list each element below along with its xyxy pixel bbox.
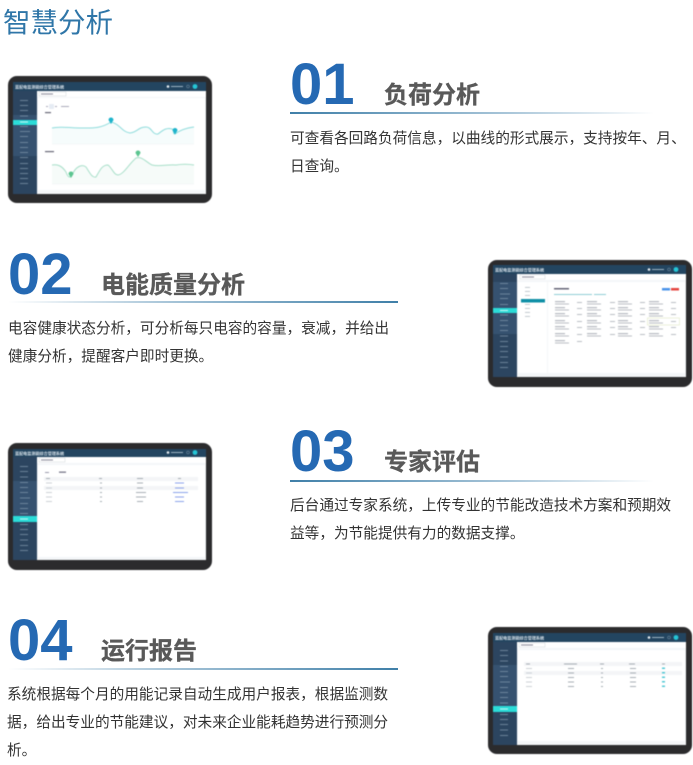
divider (290, 112, 654, 114)
heading: 负荷分析 (384, 82, 480, 109)
section 02 (8, 242, 693, 388)
description (7, 686, 388, 759)
description: 析。 (7, 743, 36, 759)
divider (8, 668, 398, 670)
number 02: 02 (8, 242, 73, 307)
description (290, 130, 686, 175)
description (8, 320, 389, 365)
screenshot: report table: 蓝配电监测能综合管理系统 (495, 634, 544, 640)
description: 电容健康状态分析，可分析每只电容的容量，衰减，并给出 (8, 321, 389, 337)
heading: 电能质量分析 (101, 272, 245, 299)
number 03: 03 (290, 419, 355, 484)
screenshot: expert table: 蓝配电监测能综合管理系统 (15, 450, 64, 456)
title: 智慧分析 (3, 7, 113, 38)
divider (290, 480, 654, 482)
number 01: 01 (290, 52, 355, 117)
description: 后台通过专家系统，上传专业的节能改造技术方案和预期效 (290, 498, 671, 514)
description: 系统根据每个月的用能记录自动生成用户报表，根据监测数 (7, 687, 388, 703)
description: 益等，为节能提供有力的数据支撑。 (290, 526, 525, 542)
screenshot: load curves: 蓝配电监测能综合管理系统 (15, 84, 64, 90)
description (290, 497, 671, 542)
description: 健康分析，提醒客户即时更换。 (8, 349, 213, 365)
heading: 专家评估 (384, 449, 480, 476)
description: 据，给出专业的节能建议，对未来企业能耗趋势进行预测分 (7, 715, 388, 731)
screenshot: capacitor grid: 蓝配电监测能综合管理系统 (495, 266, 544, 272)
screenshot: capacitor grid (487, 259, 693, 388)
description: 日查询。 (290, 159, 349, 175)
section 01 (7, 52, 686, 204)
screenshot: expert table (7, 442, 213, 571)
divider (8, 301, 398, 303)
section 03 (7, 419, 671, 571)
section 04 (7, 608, 693, 759)
heading: 运行报告 (101, 638, 197, 665)
number 04: 04 (8, 608, 73, 673)
description: 可查看各回路负荷信息，以曲线的形式展示，支持按年、月、 (290, 131, 686, 147)
screenshot: load curves (7, 75, 213, 204)
